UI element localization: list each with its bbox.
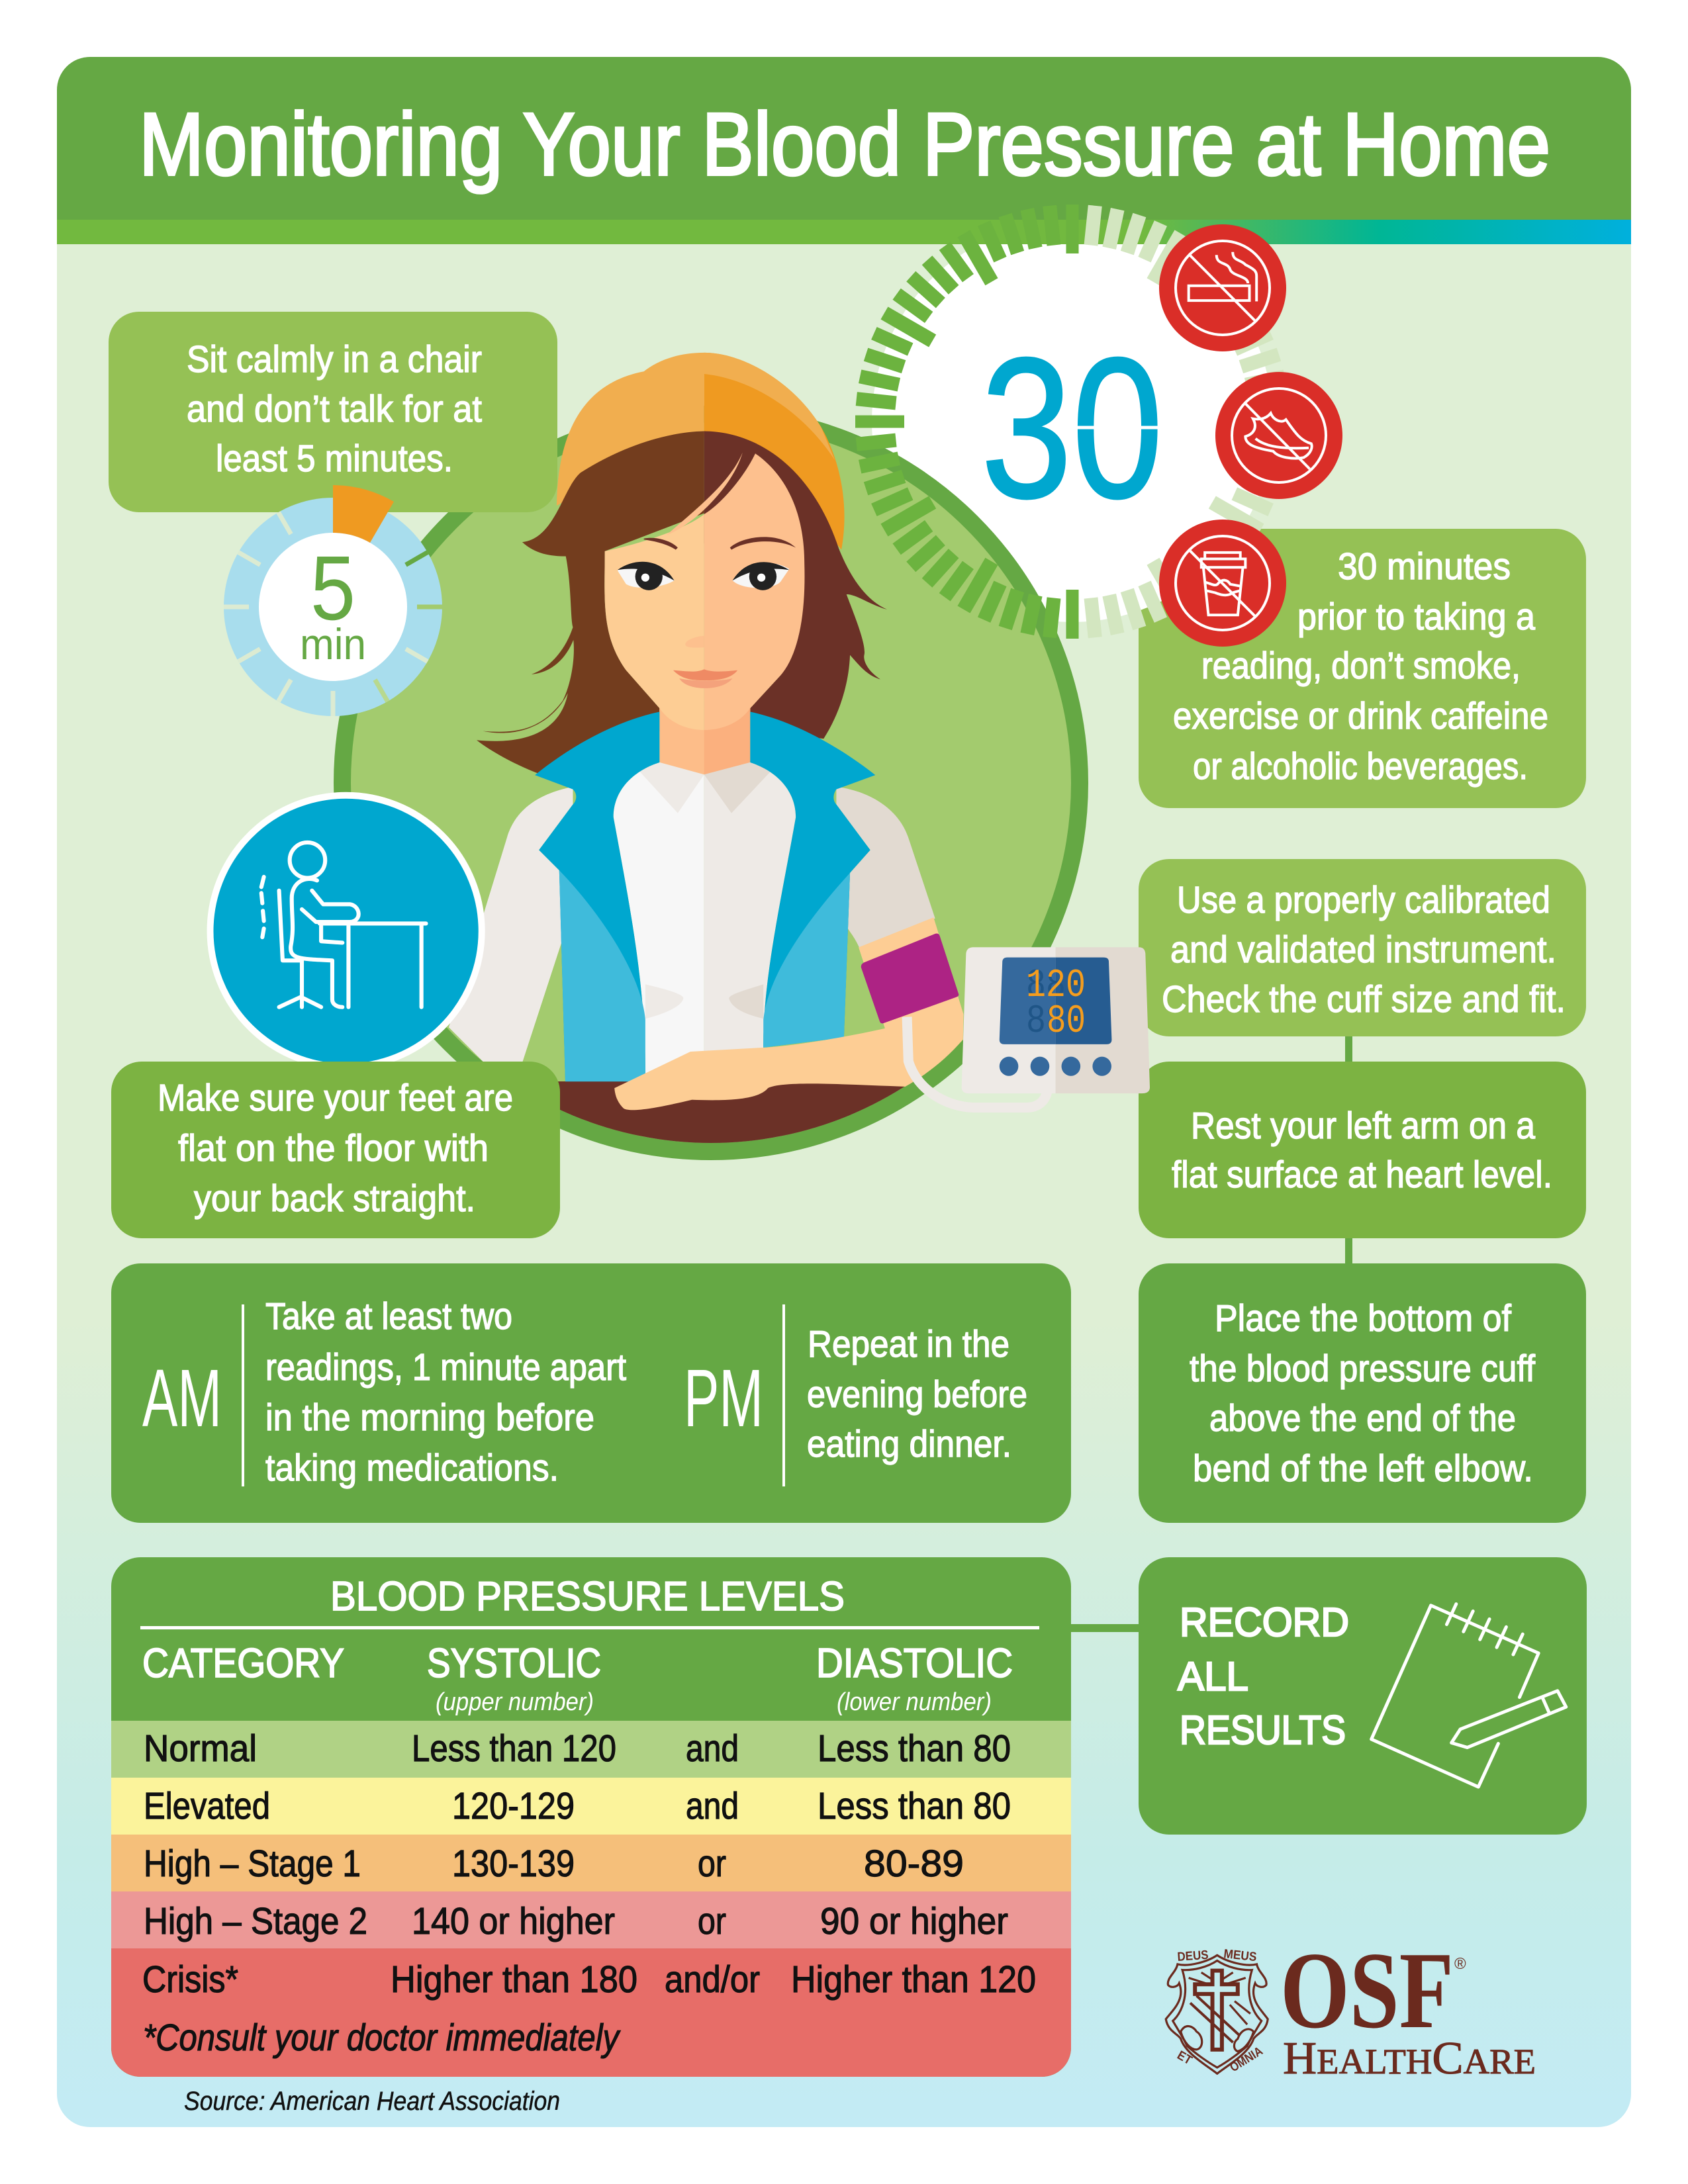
panel: record all results: [1139, 1557, 1587, 1835]
row: high stage 2: or: [698, 1900, 726, 1942]
panel: rest your arm: [1139, 1062, 1586, 1238]
eyes and brows: [618, 537, 796, 590]
row: high stage 1: or: [698, 1843, 726, 1885]
row: high stage 1: 130-139: [452, 1843, 575, 1885]
logo wordmark OSF: OSF: [1280, 1929, 1454, 2051]
title banner: [57, 57, 1631, 244]
row: high stage 2: High – Stage 2: [144, 1900, 367, 1942]
text: 30 minutes: 30 minutes: [1338, 545, 1511, 588]
text: sit calmly: and don’t talk for at: [187, 388, 482, 430]
panel: rest your arm: Rest your left arm on a: [1191, 1105, 1535, 1147]
icon: 5 minute timer: [224, 485, 442, 716]
panel: feet flat box: Make sure your feet are: [158, 1077, 513, 1119]
panel: place the cuff: above the end of the: [1209, 1397, 1516, 1439]
panel: feet flat box: [111, 1062, 560, 1238]
column headings: [142, 1641, 1013, 1716]
row: elevated: Elevated: [144, 1785, 270, 1827]
panel: feet flat box: your back straight.: [194, 1177, 475, 1220]
row: crisis: Higher than 120: [791, 1958, 1036, 2001]
row: high stage 2: 140 or higher: [412, 1900, 615, 1942]
AM instructions: in the morning before: [265, 1396, 594, 1439]
logo crest: MEUS: [1223, 1947, 1257, 1964]
AM instructions: [265, 1295, 626, 1489]
logo crest: DEUS: [1177, 1948, 1209, 1964]
row: elevated: [144, 1785, 1011, 1827]
row: high stage 2: [144, 1900, 1008, 1942]
text: sit calmly: least 5 minutes.: [216, 437, 453, 480]
icon: sitting posture badge: [210, 796, 482, 1067]
shirt: [614, 762, 796, 1081]
text: 30 minutes: or alcoholic beverages.: [1193, 745, 1528, 788]
panel: calibrated instrument: and validated instrument.: [1170, 929, 1556, 971]
panel: calibrated instrument: Check the cuff size and fit.: [1162, 978, 1566, 1021]
digital 30 readout: 30: [981, 316, 1163, 539]
row: normal: Normal: [144, 1727, 257, 1770]
PM divider: [782, 1304, 785, 1486]
PM instructions: evening before: [807, 1373, 1027, 1416]
column headings: DIASTOLIC: [816, 1641, 1013, 1686]
large green circle behind the woman: [342, 414, 1080, 1152]
panel: sit calmly box: [109, 312, 557, 512]
monitor body: [962, 947, 1150, 1093]
text: 30 minutes: reading, don’t smoke,: [1201, 645, 1521, 687]
clock tick ring: [855, 205, 1289, 639]
PM instructions: eating dinner.: [807, 1423, 1011, 1465]
panel: place the cuff: the blood pressure cuff: [1190, 1347, 1535, 1390]
row: high stage 1: High – Stage 1: [144, 1843, 361, 1885]
icon: 5 minute timer: min: [300, 619, 366, 668]
logo wordmark HealthCare: HEALTHCARE: [1283, 2033, 1536, 2084]
monitor reading: 888: [1026, 999, 1086, 1044]
text: 30 minutes: prior to taking a: [1297, 596, 1535, 638]
panel: place the cuff: bend of the left elbow.: [1193, 1447, 1533, 1490]
logo crest: [1166, 1947, 1268, 2075]
illustration: woman: [449, 353, 964, 1110]
panel: place the cuff: [1139, 1263, 1586, 1523]
column headings: SYSTOLIC: [427, 1641, 601, 1686]
panel: 30 minutes box: [1139, 529, 1586, 808]
hat: [557, 353, 845, 550]
icon: no exercise: [1215, 372, 1342, 499]
panel: AM and PM readings: [111, 1263, 1071, 1523]
cuff: [861, 933, 959, 1023]
arm: [614, 917, 964, 1110]
PM instructions: [807, 1323, 1027, 1465]
record text: ALL: [1178, 1654, 1248, 1699]
icon: 5 minute timer: 5: [310, 537, 355, 639]
record text: [1178, 1600, 1349, 1752]
row: high stage 1: 80-89: [864, 1843, 964, 1885]
monitor reading: 80: [1047, 999, 1086, 1044]
text: sit calmly: [187, 338, 482, 480]
face and neck: [604, 453, 804, 774]
crisis footnote: *Consult your doctor immediately: [143, 2017, 621, 2059]
icon: no smoking: [1159, 224, 1286, 351]
monitor reading: 120: [1026, 964, 1086, 1009]
sleeves: [449, 787, 935, 1063]
panel: rest your arm: flat surface at heart level.: [1172, 1154, 1552, 1196]
column headings: (lower number): [837, 1688, 992, 1716]
AM instructions: taking medications.: [265, 1447, 559, 1489]
tube: [907, 1017, 1047, 1108]
AM label: AM: [142, 1353, 222, 1444]
monitor right edge overlapping the boxes: [1136, 947, 1150, 1093]
hair: [477, 432, 887, 774]
record text: RESULTS: [1180, 1707, 1346, 1752]
source note: Source: American Heart Association: [184, 2087, 560, 2116]
colored rows: [111, 1721, 1071, 2077]
table heading: BLOOD PRESSURE LEVELS: [330, 1574, 845, 1619]
row: high stage 2: 90 or higher: [820, 1900, 1008, 1942]
logo crest: ET: [1174, 2048, 1194, 2068]
panel: place the cuff: Place the bottom of: [1215, 1297, 1511, 1340]
row: normal: and: [686, 1727, 739, 1770]
row: elevated: and: [686, 1785, 739, 1827]
icon: no caffeine or alcohol: [1159, 520, 1286, 647]
registered mark: ®: [1454, 1955, 1466, 1973]
row: crisis: [142, 1958, 1036, 2001]
blood pressure monitor and cuff: [861, 933, 1150, 1108]
column headings: CATEGORY: [142, 1641, 344, 1686]
text: sit calmly: Sit calmly in a chair: [187, 338, 482, 381]
row: normal: Less than 80: [818, 1727, 1011, 1770]
row: crisis: Crisis*: [142, 1958, 238, 2001]
AM instructions: Take at least two: [265, 1295, 512, 1338]
PM instructions: Repeat in the: [808, 1323, 1009, 1365]
blue jacket: [535, 712, 875, 1081]
text: 30 minutes: [1173, 545, 1548, 788]
AM instructions: readings, 1 minute apart: [265, 1346, 626, 1388]
text: 30 minutes: exercise or drink caffeine: [1173, 695, 1548, 737]
panel: blood pressure levels table: [111, 1557, 1071, 2077]
monitor buttons: [1000, 1057, 1111, 1076]
row: elevated: 120-129: [452, 1785, 575, 1827]
table under the woman's arm: [558, 1081, 904, 1143]
icon: notepad and pencil: [1372, 1604, 1566, 1787]
lips: [673, 669, 737, 688]
white clock face: [872, 221, 1273, 622]
row: crisis: and/or: [665, 1958, 760, 2001]
monitor reading: 888: [1026, 964, 1086, 1009]
row: elevated: Less than 80: [818, 1785, 1011, 1827]
PM label: PM: [684, 1353, 763, 1444]
row: high stage 1: [144, 1843, 964, 1885]
panel: feet flat box: flat on the floor with: [178, 1127, 489, 1169]
row: normal: Less than 120: [412, 1727, 616, 1770]
row: crisis: Higher than 180: [391, 1958, 637, 2001]
monitor reading: [1026, 964, 1086, 1044]
logo: OSF HealthCare: [1166, 1929, 1536, 2084]
record text: RECORD: [1180, 1600, 1349, 1645]
AM divider: [242, 1304, 244, 1486]
column headings: (upper number): [436, 1688, 594, 1716]
connectors between right-hand boxes: [1066, 1032, 1352, 1632]
logo crest: OMNIA: [1228, 2044, 1266, 2075]
panel: calibrated instrument: [1139, 859, 1586, 1036]
row: normal: [144, 1727, 1011, 1770]
monitor screen: [1000, 958, 1111, 1044]
panel: calibrated instrument: Use a properly calibrated: [1177, 879, 1550, 921]
